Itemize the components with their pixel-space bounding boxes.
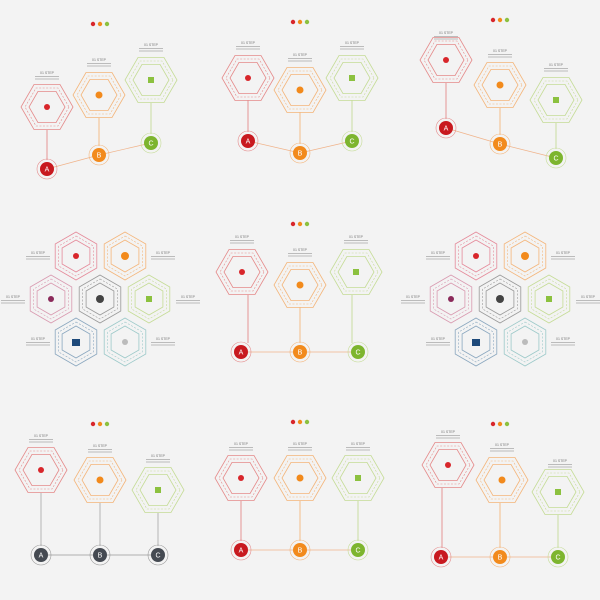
panel 8: C xyxy=(355,548,361,554)
panel 1: B xyxy=(97,152,102,160)
panel 9: A xyxy=(439,554,444,562)
panel 3: B xyxy=(498,142,503,148)
panel 5: B xyxy=(298,350,303,356)
panel 5 xyxy=(216,222,382,362)
panel 3 xyxy=(420,18,582,168)
panel 8 xyxy=(215,420,384,560)
panel 5: A xyxy=(239,350,244,356)
panel 7 xyxy=(15,422,184,565)
panel 7: C xyxy=(155,552,161,560)
panel 7: A xyxy=(39,552,44,560)
panel 8: A xyxy=(239,548,244,554)
panel 1: A xyxy=(45,166,50,174)
panel 2: C xyxy=(349,138,355,146)
panel 1 xyxy=(21,22,177,179)
panel 9: B xyxy=(498,554,503,562)
panel 2: A xyxy=(246,138,251,146)
panel 9: C xyxy=(555,554,561,562)
panel 4: honeycomb xyxy=(1,232,200,366)
panel 2 xyxy=(222,20,378,163)
panel 9 xyxy=(422,422,584,567)
panel 5: C xyxy=(355,350,361,356)
panel 7: B xyxy=(98,552,103,560)
panel 6: honeycomb xyxy=(401,232,600,366)
panel 3: A xyxy=(444,126,449,132)
panel 8: B xyxy=(298,548,303,554)
panel 1: C xyxy=(148,140,154,148)
panel 3: C xyxy=(553,156,559,162)
panel 2: B xyxy=(298,150,303,158)
